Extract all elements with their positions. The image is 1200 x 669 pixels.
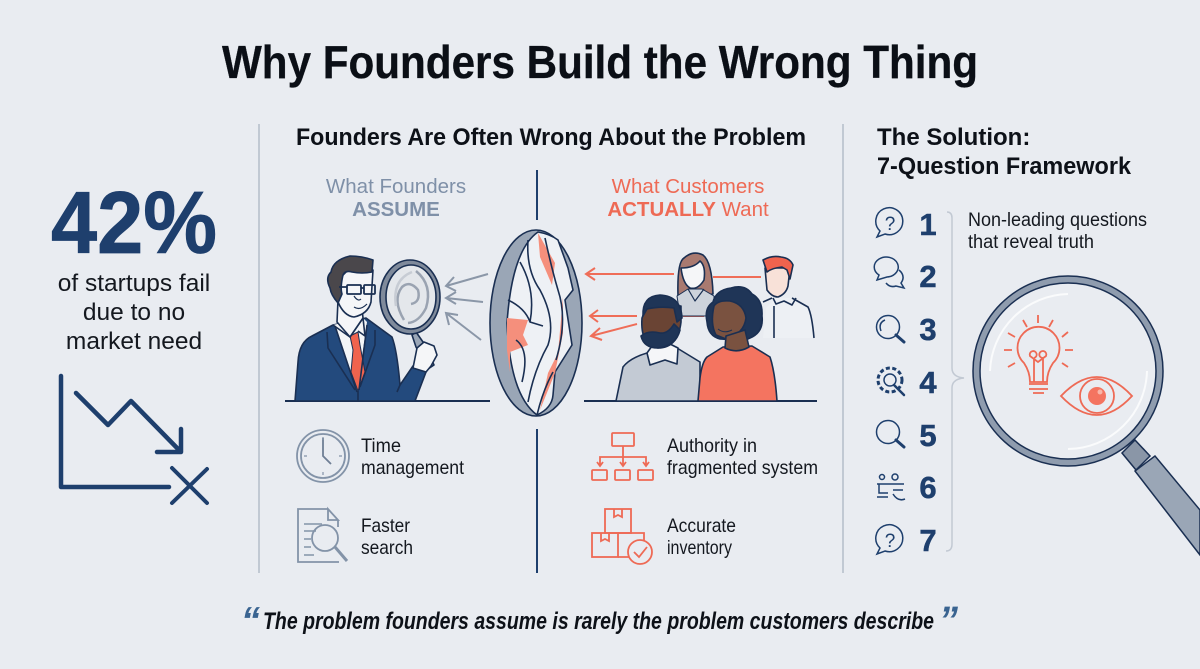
- arrows: grey: [446, 274, 488, 340]
- icon: light bulb: [1004, 315, 1073, 393]
- back woman: [678, 253, 713, 296]
- icon: hierarchy: [592, 433, 653, 480]
- want heading: What Customers: [612, 175, 764, 198]
- stat caption: due to no: [83, 299, 185, 326]
- bracket: [946, 212, 964, 551]
- icon: falling chart: [61, 376, 207, 503]
- label: [667, 435, 818, 479]
- label: inventory: [667, 537, 732, 559]
- bracket label: [968, 210, 1147, 253]
- question icons: ?: [885, 214, 895, 235]
- question numbers: 7: [919, 523, 937, 558]
- label: [361, 435, 465, 479]
- icon: clock: [297, 430, 349, 482]
- question numbers: 5: [919, 418, 937, 453]
- panel: solution: [874, 124, 1200, 558]
- panel: problem heading: Founders Are Often Wrong About the Problem: [296, 124, 806, 151]
- solution heading: 7-Question Framework: [877, 153, 1132, 180]
- label: [361, 515, 413, 559]
- label: management: [361, 457, 465, 479]
- label: fragmented system: [667, 457, 818, 479]
- hand: [413, 342, 437, 372]
- question numbers: 3: [919, 312, 937, 347]
- label: Faster: [361, 515, 410, 537]
- divider lower: [536, 429, 538, 573]
- question icons: [874, 208, 905, 554]
- question numbers: [919, 207, 937, 558]
- neck and face: [337, 300, 363, 337]
- item: faster search: [298, 509, 413, 562]
- assume heading: ASSUME: [352, 198, 440, 221]
- item: authority: [592, 433, 818, 480]
- red-haired man: [763, 298, 814, 338]
- item: inventory: [592, 509, 736, 564]
- stat caption: of startups fail: [58, 270, 210, 297]
- quote: [241, 600, 958, 642]
- quote: The problem founders assume is rarely the problem customers describe: [263, 608, 934, 635]
- woman hair: [706, 287, 762, 341]
- question numbers: 1: [919, 207, 937, 242]
- arrows: coral: [586, 268, 761, 340]
- label: [667, 515, 736, 559]
- panel: statistic: [51, 173, 217, 503]
- icon: boxes: [592, 509, 652, 564]
- bracket label: that reveal truth: [968, 232, 1094, 253]
- illustration: customers: [584, 253, 817, 401]
- question numbers: 6: [919, 470, 937, 505]
- panel: founders assume: [285, 175, 490, 401]
- question numbers: 2: [919, 259, 937, 294]
- panel: customers want: [241, 124, 1200, 642]
- stat caption: market need: [66, 328, 202, 355]
- solution heading: The Solution:: [877, 124, 1030, 151]
- quote: “: [241, 600, 260, 642]
- illustration: distorting lens: [490, 230, 582, 416]
- title: Why Founders Build the Wrong Thing: [222, 36, 978, 88]
- assume heading: What Founders: [326, 175, 466, 198]
- label: Authority in: [667, 435, 757, 457]
- bracket label: Non-leading questions: [968, 210, 1147, 231]
- question icons: ?: [885, 531, 895, 552]
- quote: ”: [939, 600, 958, 642]
- label: Time: [361, 435, 401, 457]
- icon: document search: [298, 509, 347, 562]
- hair: [328, 256, 373, 303]
- bearded man: [616, 348, 700, 401]
- want heading: ACTUALLY Want: [607, 198, 769, 221]
- divider upper: [536, 170, 538, 220]
- question numbers: 4: [919, 365, 937, 400]
- icon: eye: [1061, 377, 1132, 415]
- label: search: [361, 537, 413, 559]
- big number: 42%: [51, 173, 217, 272]
- illustration: founder with magnifier: [285, 256, 490, 401]
- illustration: large magnifier: [973, 276, 1200, 555]
- label: Accurate: [667, 515, 736, 537]
- handle: [412, 332, 434, 369]
- woman coral top: [698, 346, 777, 401]
- item: time management: [297, 430, 465, 482]
- suit: [295, 318, 426, 401]
